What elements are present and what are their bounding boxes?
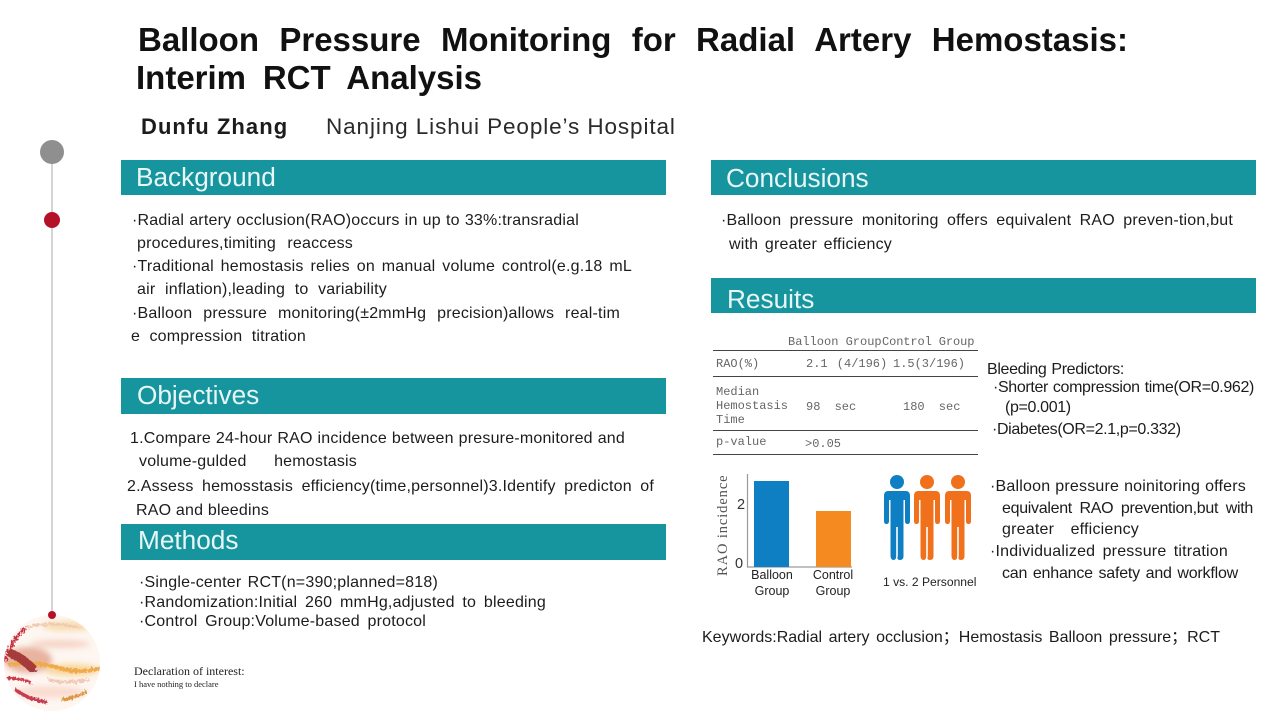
background text (131, 212, 632, 344)
keywords: Keywords:Radial artery occlusion；Hemostasis Balloon pressure；RCT (702, 628, 1220, 646)
results summary text: greater efficiency (1002, 520, 1139, 538)
row: median hemostasis time: 180 sec (903, 400, 960, 414)
author and affiliation: Nanjing Lishui People’s Hospital (326, 114, 676, 139)
row: p-value (716, 435, 841, 451)
heading: conclusions (711, 160, 1256, 195)
results table (713, 335, 978, 455)
heading: results: Resuits (727, 284, 814, 314)
heading: background: Background (136, 162, 276, 192)
objectives text: RAO and bleedins (136, 502, 269, 518)
panel: conclusions (711, 160, 1256, 252)
heading: background (121, 160, 666, 195)
bar labels: Control (813, 568, 853, 582)
row: p-value: p-value (716, 435, 766, 449)
bar chart: RAO incidence: 0 (735, 556, 743, 572)
declaration of interest (134, 664, 245, 689)
title: Interim RCT Analysis (136, 59, 482, 96)
panel: background (121, 160, 666, 344)
objectives text: volume-gulded hemostasis (139, 452, 357, 470)
row: median hemostasis time: Time (716, 413, 745, 427)
background text: air inflation),leading to variability (137, 280, 387, 298)
row: median hemostasis time: 98 sec (806, 400, 856, 414)
heading: results (711, 278, 1256, 313)
bar labels: Group (755, 584, 789, 598)
row: RAO: 1.5(3/196) (893, 357, 965, 371)
bleeding predictors text: ·Diabetes(OR=2.1,p=0.332) (992, 420, 1181, 438)
heading: conclusions: Conclusions (726, 163, 869, 193)
objectives text (127, 430, 654, 518)
background text: ·Balloon pressure monitoring(±2mmHg precision)allows real-tim (132, 304, 620, 322)
background text: procedures,timiting reaccess (137, 234, 353, 252)
illustration: textured sphere (4, 611, 100, 711)
conclusions text: ·Balloon pressure monitoring offers equivalent RAO preven-tion,but (721, 212, 1233, 228)
declaration of interest: I have nothing to declare (134, 679, 218, 689)
background text: ·Traditional hemostasis relies on manual volume control(e.g.18 mL (132, 258, 632, 274)
methods text (139, 574, 546, 630)
panel: objectives (121, 378, 666, 518)
bleeding predictors text: ·Shorter compression time(OR=0.962) (993, 378, 1254, 396)
bleeding predictors text (987, 360, 1254, 438)
bar labels (751, 568, 793, 598)
bleeding predictors text: Bleeding Predictors: (987, 360, 1124, 378)
results summary text: equivalent RAO prevention,but with (1002, 500, 1253, 516)
results summary text: can enhance safety and workflow (1002, 564, 1238, 582)
methods text: ·Control Group:Volume-based protocol (139, 612, 426, 630)
heading: methods: Methods (138, 525, 238, 555)
icon: personnel comparison (884, 475, 971, 560)
bar: balloon group (754, 481, 789, 567)
conclusions text: with greater efficiency (729, 236, 892, 252)
conclusions text (721, 212, 1233, 252)
table header: Balloon Group (788, 335, 882, 349)
author and affiliation (141, 114, 676, 139)
row: median hemostasis time: Hemostasis (716, 399, 788, 413)
bar labels: Balloon (751, 568, 793, 582)
heading: objectives: Objectives (137, 380, 259, 410)
bar labels (813, 568, 853, 598)
bar labels: Group (816, 584, 850, 598)
row: p-value: >0.05 (805, 437, 841, 451)
row: median hemostasis time (716, 385, 960, 427)
background text: ·Radial artery occlusion(RAO)occurs in up to 33%:transradial (132, 212, 579, 228)
row: median hemostasis time: Median (716, 385, 759, 399)
results summary text: ·Balloon pressure noinitoring offers (990, 478, 1246, 494)
background text: e compression titration (131, 328, 306, 344)
heading: methods (121, 524, 666, 560)
bar chart: RAO incidence: 2 (737, 497, 745, 513)
row: RAO (716, 357, 965, 371)
objectives text: 1.Compare 24-hour RAO incidence between presure-monitored and (130, 430, 625, 446)
bar: control group (816, 511, 851, 567)
heading: objectives (121, 378, 666, 414)
personnel caption: 1 vs. 2 Personnel (883, 575, 976, 589)
declaration of interest: Declaration of interest: (134, 664, 245, 678)
timeline decoration (40, 140, 64, 612)
methods text: ·Randomization:Initial 260 mmHg,adjusted to bleeding (139, 594, 546, 610)
row: RAO: RAO(%) (716, 357, 759, 371)
bar chart: RAO incidence (715, 474, 852, 576)
row: RAO: 2.1 (4/196) (806, 357, 887, 371)
results summary text (990, 478, 1253, 582)
title (136, 21, 1128, 96)
y axis title: RAO incidence (715, 474, 731, 576)
bleeding predictors text: (p=0.001) (1005, 398, 1071, 416)
author and affiliation: Dunfu Zhang (141, 114, 288, 139)
title: Balloon Pressure Monitoring for Radial Artery Hemostasis: (138, 21, 1128, 58)
panel: methods (121, 524, 666, 630)
results summary text: ·Individualized pressure titration (990, 542, 1228, 560)
objectives text: 2.Assess hemosstasis efficiency(time,personnel)3.Identify predicton of (127, 478, 654, 494)
methods text: ·Single-center RCT(n=390;planned=818) (139, 574, 438, 590)
results table: Control Group (882, 335, 974, 349)
